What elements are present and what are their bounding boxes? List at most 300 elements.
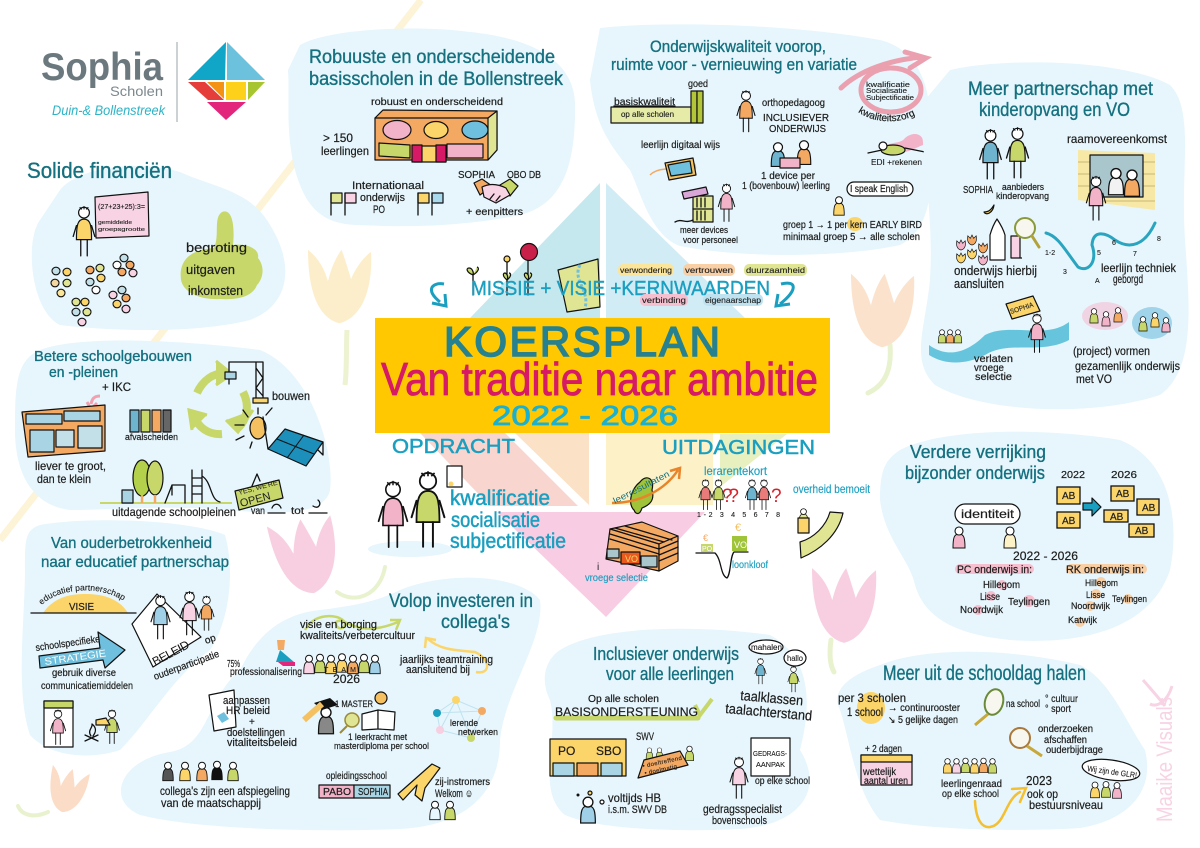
icon: government bbox=[793, 482, 871, 558]
icon: strategy arrow: communicatiemiddelen bbox=[41, 681, 133, 692]
text: PC and RK education: Katwijk bbox=[1068, 615, 1098, 625]
icon: raamovereenkomst window bbox=[1067, 132, 1168, 220]
icon: behaviour specialist bbox=[703, 738, 810, 827]
icon: teacher shortage: lerarentekort bbox=[704, 464, 768, 478]
icon and text: HR beleid: vitaliteitsbeleid bbox=[227, 737, 297, 749]
arrow: yellow up bbox=[975, 788, 1026, 827]
icon and text: voltijds HB: voltijds HB bbox=[608, 791, 661, 805]
icon: EDI rekenen: EDI +rekenen bbox=[871, 158, 922, 167]
icon: beleid document with parents: ouderparticipatie bbox=[152, 649, 221, 683]
icon: thumb up with budget words: uitgaven bbox=[186, 262, 235, 277]
icon: visie hill: VISIE bbox=[69, 602, 94, 613]
tulip: peach small bbox=[18, 765, 90, 816]
heading: meer partnerschap: Meer partnerschap met bbox=[968, 79, 1154, 100]
text: PC and RK education: RK onderwijs in: bbox=[1066, 564, 1144, 576]
heading: onderwijskwaliteit bbox=[611, 37, 857, 74]
icon: learning river bbox=[1045, 223, 1177, 286]
heading: opdracht: OPDRACHT bbox=[392, 436, 515, 458]
icon: tangram figure bbox=[276, 640, 295, 666]
text: visie en borging with arrow bbox=[300, 616, 415, 642]
icon: moon, tulips, rocket, magnifier: aansluiten bbox=[954, 276, 1004, 291]
text: basisondersteuning bbox=[555, 694, 712, 719]
heading: volop investeren: Volop investeren in bbox=[389, 591, 533, 612]
arrow and kwaliteitszorg circle: Subjectificatie bbox=[866, 95, 914, 102]
chart: AB schools 2022 to 2026: AB bbox=[1062, 516, 1076, 527]
icon: strategy arrow: STRATEGIE bbox=[44, 648, 107, 668]
text: PC and RK education: Noordwijk bbox=[1071, 601, 1110, 611]
icon: project groups: (project) vormen bbox=[1073, 344, 1150, 358]
panel: betere schoolgebouwen bbox=[15, 341, 331, 519]
text: professionalisering: 75% bbox=[227, 659, 240, 670]
icon: teacher with board: groepsgrootte bbox=[98, 227, 145, 233]
title box bbox=[375, 318, 830, 433]
callout: I speak English: I speak English bbox=[850, 184, 908, 195]
heading: inclusiever: Inclusiever onderwijs bbox=[593, 644, 739, 664]
icon: two figures with paper bbox=[379, 466, 462, 547]
icon: road side entrants bbox=[398, 764, 490, 820]
icon: right curved arrow bbox=[776, 283, 793, 306]
text: early bird: groep 1 → 1 per kern EARLY BIRD bbox=[783, 220, 922, 231]
icon: orthopedagoog: INCLUSIEVER bbox=[763, 113, 829, 124]
icon: open sign: OPEN bbox=[239, 490, 272, 510]
icon: crane: bouwen bbox=[272, 389, 310, 403]
icon: magnifier after school bbox=[975, 687, 1079, 725]
text: visie en borging with arrow: visie en borging bbox=[300, 619, 377, 631]
icon: orthopedagoog bbox=[737, 90, 829, 135]
text: visie en borging with arrow: kwaliteits/verbetercultuur bbox=[300, 630, 415, 642]
chart: AB schools 2022 to 2026: 2026 bbox=[1111, 470, 1138, 481]
icon and text: HR beleid: doelstellingen bbox=[227, 727, 285, 739]
callout: GLR bbox=[1081, 756, 1141, 798]
icon: leaving early selection bbox=[929, 296, 1069, 383]
text: PC and RK education bbox=[955, 549, 1147, 627]
icon: learning river: 3 bbox=[1063, 269, 1067, 276]
heading: volop investeren bbox=[389, 591, 533, 633]
text: PC and RK education: Teylingen bbox=[1008, 597, 1050, 608]
credit: Maaike Visuals: Maaike Visuals bbox=[1152, 697, 1177, 822]
icon: opleidingsschool: PABO bbox=[323, 787, 351, 798]
chart: AB schools 2022 to 2026: 2022 bbox=[1061, 470, 1085, 481]
icon: magnifier after school: ° cultuur bbox=[1045, 694, 1079, 705]
icon and text: voltijds HB: i.s.m. SWV DB bbox=[608, 804, 667, 816]
chart: AB schools 2022 to 2026: AB bbox=[1116, 489, 1130, 500]
icon: teacher shortage: ? bbox=[771, 486, 782, 507]
icon: flags bbox=[331, 193, 443, 215]
icon: learning networks: lerende bbox=[450, 718, 478, 728]
icon: open sign: YES, WE'RE bbox=[238, 480, 279, 497]
icon: road side entrants: Welkom ☺ bbox=[435, 788, 473, 800]
text: three purposes bbox=[450, 487, 566, 553]
callout: mahalen and hallo: mahalen bbox=[751, 643, 782, 652]
text: three purposes: socialisatie bbox=[451, 509, 540, 532]
icon: behaviour specialist: op elke school bbox=[755, 776, 810, 787]
icon and text: colleagues mirror society: van de maatschappij bbox=[161, 796, 261, 810]
icon: wage gap: € bbox=[703, 533, 708, 543]
icon: wage gap: loonkloof bbox=[732, 560, 768, 571]
text: PC and RK education: Teylingen bbox=[1112, 594, 1147, 604]
panel: inclusiever onderwijs bbox=[545, 629, 813, 830]
icon: raamovereenkomst window: raamovereenkomst bbox=[1067, 132, 1168, 146]
text: PC and RK education: 2022 - 2026 bbox=[1013, 549, 1078, 563]
text: internationaal onderwijs: onderwijs bbox=[360, 192, 405, 204]
icon and text: master bbox=[304, 692, 429, 751]
heading: meer partnerschap bbox=[968, 79, 1154, 121]
icon and text: voltijds HB bbox=[576, 791, 667, 823]
icon: teacher with board bbox=[73, 192, 149, 256]
heading: volop investeren: collega's bbox=[441, 612, 510, 633]
icon: wage gap: € bbox=[735, 522, 741, 534]
icon: opleidingsschool bbox=[319, 771, 390, 798]
icon: VO building bbox=[606, 522, 678, 571]
icon: beleid document with parents: op bbox=[203, 633, 218, 647]
icon: digital learning laptop bbox=[641, 140, 720, 180]
icon: crane bbox=[225, 362, 310, 403]
chart: basiskwaliteit bar bbox=[611, 79, 708, 123]
icon: thumb up with budget words: begroting bbox=[186, 240, 247, 255]
icon and text: colleagues mirror society bbox=[160, 761, 290, 810]
panel: robuuste basisscholen: leerlingen bbox=[321, 144, 369, 158]
logo: Sophia Scholen: Sophia bbox=[41, 46, 163, 89]
logo: Sophia Scholen: Duin-& Bollenstreek bbox=[52, 102, 166, 118]
icon: recycling arrows bbox=[189, 361, 253, 434]
text: PC and RK education: Hillegom bbox=[983, 580, 1020, 591]
text: vroege selectie: vroege selectie bbox=[585, 573, 648, 584]
icon: SWV: • doelmatig bbox=[644, 764, 678, 777]
icon: learning river: 8 bbox=[1157, 236, 1161, 243]
icon and text: master: 1 MASTER bbox=[335, 699, 373, 709]
icon: PO SBO school: SBO bbox=[596, 744, 621, 758]
text: 2023 bestuursniveau: ook op bbox=[1027, 787, 1058, 801]
icon: handshake people: kinderopvang bbox=[996, 191, 1049, 201]
icon: leaving early selection: verlaten bbox=[974, 354, 1013, 365]
text: basisondersteuning: BASISONDERSTEUNING bbox=[555, 705, 698, 719]
icon: project groups: gezamenlijk onderwijs bbox=[1075, 359, 1180, 373]
chart: AB schools 2022 to 2026: AB bbox=[1135, 526, 1149, 537]
icon: calendar statutory hours: wettelijk bbox=[862, 767, 897, 778]
panel: ouderbetrokkenheid bbox=[22, 520, 230, 756]
heading: verdere verrijking: Verdere verrijking bbox=[910, 442, 1046, 462]
text: van sunrise tot moon bbox=[251, 500, 327, 517]
panel: betere schoolgebouwen: dan te klein bbox=[37, 472, 91, 486]
icon: project groups: met VO bbox=[1076, 372, 1112, 386]
panel: robuuste basisscholen: > 150 bbox=[323, 131, 353, 145]
text: PC and RK education: Hillegom bbox=[1085, 578, 1118, 588]
chart: AB schools 2022 to 2026: AB bbox=[1110, 512, 1124, 523]
icon: device cart with person: meer devices bbox=[680, 225, 728, 235]
text: per 3 scholen: per 3 scholen bbox=[838, 691, 906, 705]
missie visie kernwaarden band bbox=[431, 244, 807, 312]
chart: basiskwaliteit bar: basiskwaliteit bbox=[614, 97, 675, 108]
icon: government: overheid bemoeit bbox=[793, 482, 871, 496]
panel: robuuste basisscholen: OBO DB bbox=[507, 170, 541, 181]
icon: handshake bbox=[474, 179, 518, 203]
central tangram background bbox=[420, 183, 787, 617]
heading: robuuste: Robuuste en onderscheidende bbox=[309, 47, 555, 68]
icon: handshake people: aanbieders bbox=[1002, 182, 1044, 192]
icon: behaviour specialist: bovenschools bbox=[712, 815, 767, 827]
arrow and kwaliteitszorg circle bbox=[838, 50, 932, 122]
panel: betere schoolgebouwen: + IKC bbox=[102, 380, 131, 394]
text: PC and RK education: Lisse bbox=[980, 592, 1000, 603]
core value tags: verwondering bbox=[620, 265, 672, 275]
tulip: pink right bbox=[812, 568, 876, 672]
logo: Sophia Scholen: Scholen bbox=[110, 83, 163, 99]
icon: wage gap: VO bbox=[734, 540, 747, 550]
heading: ouderbetrokkenheid: naar educatief partnerschap bbox=[41, 554, 229, 571]
text: per 3 scholen: ↘ 5 gelijke dagen bbox=[888, 715, 958, 726]
icon: EDI rekenen bbox=[868, 134, 925, 167]
icon and text: master: masterdiploma per school bbox=[334, 741, 429, 751]
icon: school building bbox=[375, 110, 497, 162]
heading: solide financien: Solide financiën bbox=[27, 158, 172, 183]
icon: SWV bbox=[636, 731, 694, 778]
icon and text: HR beleid bbox=[209, 690, 297, 749]
icon: PO SBO school: PO bbox=[558, 744, 575, 758]
heading: meer uit de schooldag: Meer uit de schooldag halen bbox=[883, 662, 1086, 685]
icon: door and campfire bbox=[44, 701, 119, 747]
icon: strategy arrow: gebruik diverse bbox=[52, 668, 116, 679]
core value tags bbox=[618, 264, 807, 306]
icon: visie hill: educatief partnerschap bbox=[40, 585, 125, 604]
text: taalklassen: taalklassen bbox=[740, 687, 804, 708]
icon: magnifier after school: na school bbox=[1006, 699, 1040, 710]
icon: team 2026: 2026 bbox=[333, 672, 360, 686]
icon: VO building: VO bbox=[625, 554, 638, 564]
panel: robuuste basisscholen: SOPHIA bbox=[458, 170, 495, 181]
icon: device cart with person: voor personeel bbox=[683, 235, 738, 245]
panel: robuuste basisscholen: robuust en onderscheidend bbox=[371, 97, 503, 108]
icon: learning networks bbox=[433, 696, 498, 742]
icon: waste bins: afvalscheiden bbox=[125, 432, 178, 442]
arrow and kwaliteitszorg circle: Socialisatie bbox=[866, 88, 907, 95]
heading: verdere verrijking bbox=[905, 442, 1046, 483]
icon: road side entrants: zij-instromers bbox=[435, 777, 490, 788]
icon: orthopedagoog: orthopedagoog bbox=[762, 98, 825, 109]
callout: mahalen and hallo bbox=[749, 640, 806, 692]
text: teamtraining with arrow: jaarlijks teamtraining bbox=[399, 654, 493, 666]
icon: learning river: geborgd bbox=[1113, 272, 1143, 286]
heading: onderwijskwaliteit: Onderwijskwaliteit voorop, bbox=[650, 37, 826, 56]
heading: ouderbetrokkenheid bbox=[41, 535, 229, 571]
text: internationaal onderwijs: Internationaal bbox=[352, 180, 424, 192]
text: taalklassen bbox=[725, 687, 813, 724]
panel: verdere verrijking bbox=[880, 432, 1173, 641]
icon: strategy arrow bbox=[35, 632, 133, 692]
icon: left curved arrow bbox=[431, 284, 446, 306]
heading: onderwijskwaliteit: ruimte voor - vernieuwing en variatie bbox=[611, 55, 857, 74]
text: PC and RK education: Noordwijk bbox=[960, 605, 1004, 616]
icon: schoolyard with trees and slide bbox=[100, 460, 232, 503]
text: internationaal onderwijs: PO bbox=[373, 204, 385, 216]
icon: magnifier after school: ° sport bbox=[1045, 704, 1071, 715]
panel: solide financien bbox=[27, 158, 285, 330]
chart: AB schools 2022 to 2026: AB bbox=[1062, 491, 1076, 502]
text: 2023 bestuursniveau: 2023 bbox=[1026, 773, 1052, 788]
icon: handshake people bbox=[963, 127, 1049, 201]
icon: strategy arrow: schoolspecifieke bbox=[35, 634, 101, 654]
icon: waste bins bbox=[125, 410, 178, 442]
tulip: pink centre bbox=[267, 513, 385, 600]
icon: pupil council bbox=[941, 758, 1002, 800]
text: teamtraining with arrow bbox=[399, 638, 493, 676]
callout: mahalen and hallo: hallo bbox=[787, 654, 804, 663]
icon: digital learning laptop: leerlijn digitaal wijs bbox=[641, 140, 720, 151]
icon: leaving early selection: selectie bbox=[975, 372, 1012, 383]
icon and text: colleagues mirror society: collega's zijn een afspiegeling bbox=[160, 784, 290, 798]
heading: verdere verrijking: bijzonder onderwijs bbox=[905, 463, 1045, 483]
block: uitdagingen bbox=[585, 437, 871, 584]
icon: school building bbox=[22, 396, 105, 457]
heading: years: 2022 - 2026 bbox=[492, 400, 678, 431]
icon: magnifier parental contribution: ouderbijdrage bbox=[1046, 745, 1103, 756]
icon: team 2026: T E A M bbox=[324, 667, 356, 674]
panel: robuuste basisscholen bbox=[288, 28, 575, 226]
icon: behaviour specialist: GEDRAGS- bbox=[753, 749, 787, 758]
icon: map bbox=[558, 259, 600, 312]
heading: robuuste: basisscholen in de Bollenstreek bbox=[309, 69, 563, 90]
chart: basiskwaliteit bar: goed bbox=[688, 79, 708, 90]
icon: calendar statutory hours: aantal uren bbox=[864, 776, 908, 787]
text: van sunrise tot moon: tot bbox=[291, 506, 304, 517]
core value tags: duurzaamheid bbox=[746, 265, 805, 275]
heading: inclusiever: voor alle leerlingen bbox=[606, 664, 734, 684]
icon: learning river: 5 bbox=[1097, 250, 1101, 257]
icon: learning networks: netwerken bbox=[458, 727, 498, 737]
background diagonal stem bbox=[0, 0, 421, 540]
heading: betere schoolgebouwen: en -pleinen bbox=[49, 364, 118, 381]
icon: opleidingsschool: opleidingsschool bbox=[326, 771, 387, 782]
icon: pupil council: leerlingenraad bbox=[941, 779, 1002, 790]
chart: AB schools 2022 to 2026: AB bbox=[1142, 503, 1156, 514]
icon: handshake people: SOPHIA bbox=[963, 185, 993, 196]
icon: teacher shortage bbox=[697, 464, 782, 519]
icon: SWV: SWV bbox=[636, 731, 654, 743]
text: three purposes: subjectificatie bbox=[450, 530, 566, 553]
callout: identiteit bbox=[953, 504, 1020, 548]
callout: I speak English bbox=[834, 182, 913, 215]
icon: teacher shortage: ?? bbox=[722, 486, 739, 507]
heading: meer partnerschap: kinderopvang en VO bbox=[979, 100, 1130, 121]
icon: calendar statutory hours bbox=[861, 744, 912, 787]
heading: van traditie naar ambitie: Van traditie naar ambitie bbox=[381, 353, 818, 405]
callout: identiteit: identiteit bbox=[961, 507, 1015, 521]
icon: beleid document with parents bbox=[132, 591, 221, 683]
icon: behaviour specialist: AANPAK bbox=[756, 760, 785, 769]
text: 2023 bestuursniveau bbox=[1026, 773, 1103, 812]
panel: betere schoolgebouwen: uitdagende schoolpleinen bbox=[112, 505, 236, 519]
text: vroege selectie: i bbox=[597, 562, 599, 573]
icon: magnifier parental contribution bbox=[1010, 724, 1103, 756]
block: opdracht bbox=[368, 436, 566, 557]
icon and text: HR beleid: aanpassen bbox=[223, 695, 270, 707]
core value tags: eigenaarschap bbox=[705, 295, 761, 305]
icon: beleid document with parents: BELEID bbox=[150, 637, 192, 669]
arrow and kwaliteitszorg circle: kwaliteitszorg bbox=[858, 106, 915, 122]
text: internationaal onderwijs bbox=[352, 180, 424, 216]
panel: betere schoolgebouwen: liever te groot, bbox=[35, 459, 106, 473]
logo: Sophia Scholen bbox=[41, 42, 265, 122]
icon and text: master: 1 leerkracht met bbox=[348, 732, 407, 742]
icon: learning river: A bbox=[1095, 278, 1100, 285]
icon: thumb up with budget words: inkomsten bbox=[188, 283, 243, 298]
heading: uitdagingen: UITDAGINGEN bbox=[662, 437, 815, 459]
icon: wage gap bbox=[696, 522, 768, 578]
icon: pupils with device bbox=[742, 141, 830, 192]
icon: leaving early selection: vroege bbox=[974, 363, 1004, 374]
chart: AB schools 2022 to 2026 bbox=[1057, 470, 1159, 537]
panel: meer partnerschap bbox=[921, 62, 1189, 409]
text: teamtraining with arrow: aansluitend bij bbox=[406, 664, 470, 676]
icon: behaviour specialist: gedragsspecialist bbox=[703, 802, 783, 816]
icon: visie hill bbox=[30, 585, 137, 614]
icon: learning river: 7 bbox=[1133, 251, 1137, 258]
icon: teacher with board: (27+23+25):3= bbox=[98, 204, 145, 211]
icon: learning river: 6 bbox=[1112, 240, 1116, 247]
icon: SWV: • doeltreffend bbox=[642, 756, 683, 770]
panel: volop investeren bbox=[121, 578, 540, 830]
tulip: peach bbox=[851, 274, 914, 393]
core value tags: vertrouwen bbox=[685, 265, 733, 275]
icon: pupil council: op elke school bbox=[942, 789, 999, 800]
icon: learning river: leerlijn techniek bbox=[1101, 261, 1177, 275]
icon: team 2026 bbox=[304, 654, 380, 686]
chart: basiskwaliteit bar: op alle scholen bbox=[621, 110, 674, 119]
icon: orthopedagoog: ONDERWIJS bbox=[769, 124, 826, 135]
text: van sunrise tot moon: van bbox=[251, 506, 265, 517]
text: PC and RK education: PC onderwijs in: bbox=[957, 564, 1032, 576]
icon and text: HR beleid: + bbox=[249, 717, 255, 728]
icon: magnifier parental contribution: onderzoeken bbox=[1038, 724, 1093, 735]
heading: betere schoolgebouwen bbox=[34, 348, 192, 381]
heading: robuuste bbox=[309, 47, 563, 90]
icon: pupils with device: 1 (bovenbouw) leerling bbox=[742, 181, 830, 192]
icon: thumb up with budget words bbox=[181, 211, 263, 299]
panel: meer uit de schooldag bbox=[837, 652, 1147, 830]
icon: growing flowers bbox=[467, 244, 538, 295]
text: professionalisering: professionalisering bbox=[230, 667, 302, 678]
icon: moon, tulips, rocket, magnifier bbox=[954, 205, 1039, 291]
panel: onderwijskwaliteit bbox=[590, 24, 932, 255]
text: 2023 bestuursniveau: bestuursniveau bbox=[1029, 798, 1103, 812]
icon: learning river: 1-2 bbox=[1045, 250, 1055, 257]
text: three purposes: kwalificatie bbox=[450, 487, 550, 510]
tulip: pale yellow bbox=[308, 250, 371, 385]
icon: groups of pupils bbox=[51, 254, 137, 326]
heading: ouderbetrokkenheid: Van ouderbetrokkenheid bbox=[51, 535, 212, 552]
text: professionalisering bbox=[227, 659, 302, 678]
icon: opleidingsschool: SOPHIA bbox=[358, 787, 388, 798]
heading: betere schoolgebouwen: Betere schoolgebouwen bbox=[34, 348, 192, 365]
text: early bird bbox=[783, 217, 922, 243]
icon and text: HR beleid: HR beleid bbox=[226, 705, 270, 717]
callout: GLR: Wij zijn de GLR! bbox=[1087, 764, 1137, 780]
core value tags: verbinding bbox=[642, 295, 686, 305]
icon: moon, tulips, rocket, magnifier: onderwijs hierbij bbox=[954, 263, 1037, 278]
icon: wage gap: PO bbox=[702, 546, 713, 553]
heading: koersplan: KOERSPLAN bbox=[444, 318, 720, 365]
icon: device cart with person bbox=[675, 184, 738, 245]
text: vroege selectie bbox=[585, 562, 648, 584]
text: taalklassen: taalachterstand bbox=[725, 700, 813, 724]
text: per 3 scholen: → continurooster bbox=[888, 703, 961, 714]
text: basisondersteuning: Op alle scholen bbox=[588, 694, 659, 705]
icon: teacher shortage: 1-2 3 4 5 6 7 8 bbox=[697, 512, 780, 519]
icon: leaving early selection: SOPHIA bbox=[1009, 302, 1035, 316]
arrow and kwaliteitszorg circle: kwalificatie bbox=[866, 82, 910, 89]
icon: netherlands with rising arrow bbox=[611, 468, 680, 514]
icon: calendar statutory hours: + 2 dagen bbox=[865, 744, 902, 755]
icon: open sign bbox=[235, 474, 283, 510]
